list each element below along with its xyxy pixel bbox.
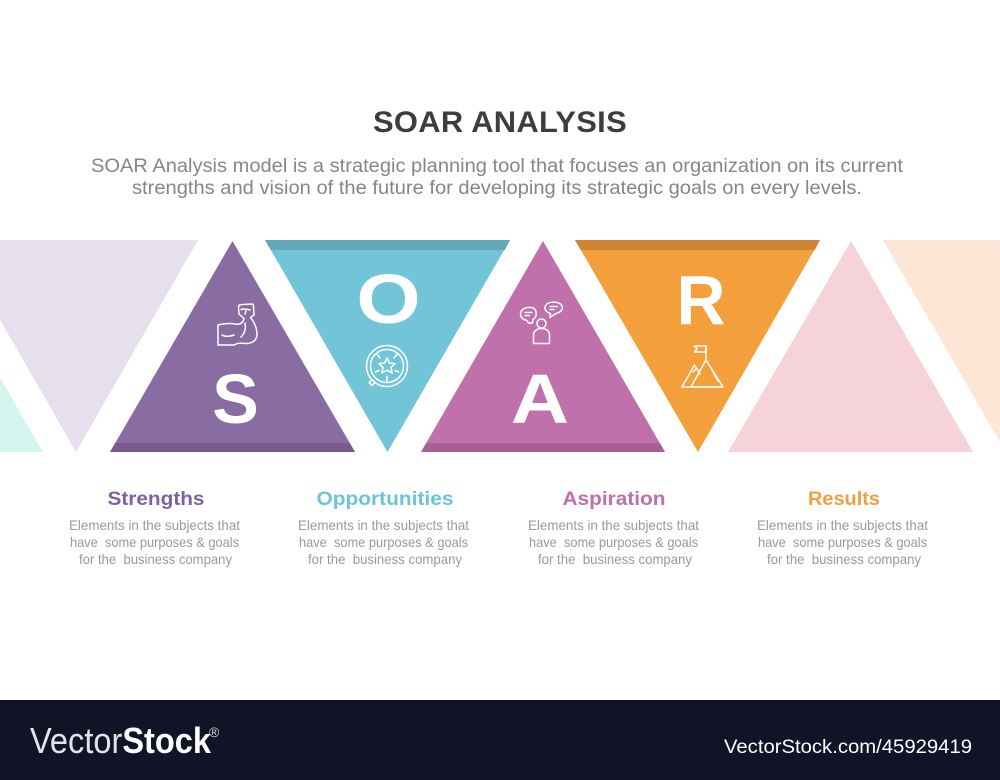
text block: opportunities [298,489,469,567]
icon: flexed arm [218,304,257,345]
intro text: SOAR Analysis model is a strategic planning tool that focuses an organization on its current [91,156,904,177]
text block: opportunities: Elements in the subjects that [298,517,469,533]
text block: opportunities: Opportunities [316,489,454,510]
icon: star in magnifier [366,346,408,386]
top band [265,240,510,250]
panel: opportunities triangle [265,240,510,452]
intro text [91,156,904,199]
top band [575,240,820,250]
text block: results [757,489,928,567]
text block: aspiration [528,489,699,567]
text block: results: Results [808,489,880,510]
text block: opportunities: have some purposes & goals [299,534,468,550]
letter A: A [511,360,569,438]
text block: results: have some purposes & goals [758,534,927,550]
text block: aspiration: Elements in the subjects that [528,517,699,533]
text block: strengths [69,489,240,567]
text block: aspiration: Aspiration [562,489,666,510]
text block: aspiration: for the business company [538,551,692,567]
footer logo: VectorStock [30,720,212,761]
title: SOAR ANALYSIS [373,107,627,139]
text block: results: for the business company [767,551,921,567]
text block: results: Elements in the subjects that [757,517,928,533]
icon: person with speech bubbles [520,302,562,344]
faded triangle: lavender [0,240,198,452]
footer url: VectorStock.com/45929419 [724,737,972,758]
faded triangle: mint [0,241,43,452]
base band [110,443,355,452]
faded triangle: pink [728,241,973,452]
footer bar [0,700,1000,780]
registered mark: ® [209,724,220,740]
panel: strengths triangle [110,241,355,452]
faded triangle: peach [883,240,1000,442]
text block: strengths: have some purposes & goals [70,534,239,550]
base band [421,443,665,452]
text block: strengths: Strengths [108,489,204,510]
text block: opportunities: for the business company [308,551,462,567]
letter S: S [212,360,259,438]
panel: results triangle [575,240,820,452]
panel: aspiration triangle [421,241,665,452]
text block: strengths: Elements in the subjects that [69,517,240,533]
letter R: R [676,261,726,339]
text block: strengths: for the business company [79,551,232,567]
text block: aspiration: have some purposes & goals [529,534,698,550]
letter O: O [356,261,421,339]
icon: mountains with flag [682,346,723,387]
intro text: strengths and vision of the future for developing its strategic goals on every levels. [132,178,862,199]
